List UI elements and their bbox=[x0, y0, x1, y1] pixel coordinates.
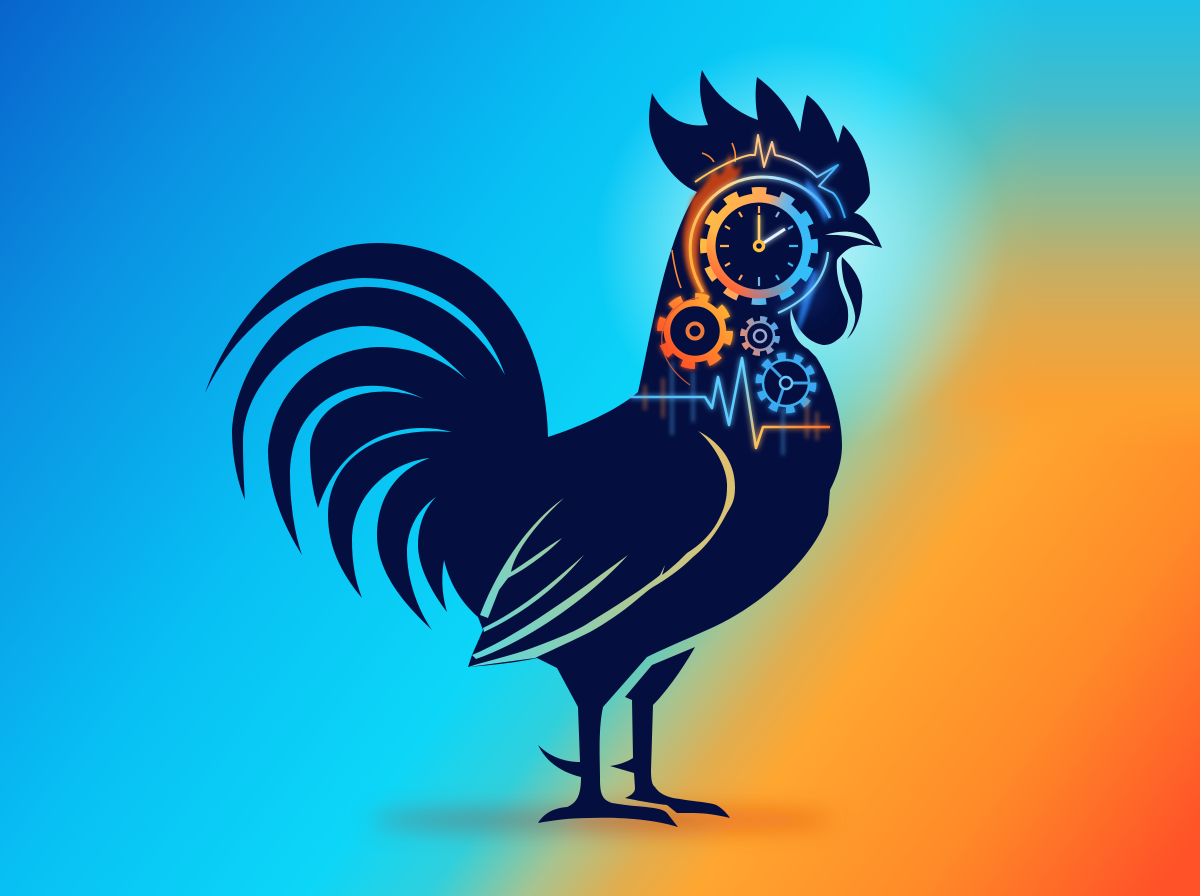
rooster silhouette bbox=[205, 70, 882, 827]
flames beside ring bbox=[683, 152, 741, 305]
clock face bbox=[716, 203, 802, 289]
thin orange arc bbox=[662, 298, 699, 385]
second feather stripe bbox=[483, 555, 584, 632]
small embers bbox=[672, 143, 735, 288]
gear rim bbox=[667, 303, 723, 359]
teal top right corner bbox=[895, 0, 1200, 427]
small gear bbox=[744, 320, 776, 352]
gear hub bbox=[688, 324, 702, 338]
wing feather stripes bbox=[468, 431, 735, 667]
upper branching feather stripe bbox=[480, 498, 564, 618]
clock ticks bbox=[720, 206, 798, 286]
long wing outline stripe bbox=[468, 431, 735, 667]
clock gear bbox=[706, 192, 812, 300]
gear hub bbox=[780, 377, 792, 389]
gear teeth bbox=[706, 192, 812, 300]
clock minute hand bbox=[759, 229, 785, 246]
halo behind head bbox=[595, 40, 1005, 450]
blue sparkle ticks bbox=[672, 362, 783, 455]
top pulse line bbox=[695, 135, 845, 218]
third feather stripe bbox=[472, 555, 628, 659]
orange sparkle ticks bbox=[645, 378, 817, 440]
blue haze on face bbox=[778, 268, 822, 312]
red tint on gear bbox=[711, 198, 807, 294]
shadow right part bbox=[565, 809, 835, 831]
gear spokes bbox=[768, 364, 810, 404]
clock centre bbox=[754, 242, 764, 250]
gear rim bbox=[711, 198, 807, 294]
shadow left part bbox=[370, 810, 710, 830]
gear teeth bbox=[759, 356, 813, 410]
gear hub bbox=[754, 330, 766, 342]
gear teeth bbox=[662, 298, 728, 364]
clock hour hand bbox=[758, 215, 760, 246]
gear rim bbox=[763, 360, 809, 406]
beak highlight bbox=[825, 232, 875, 245]
flames right side bbox=[797, 178, 826, 335]
gear teeth bbox=[744, 320, 776, 352]
illustration: glowing clock and gears bbox=[630, 135, 875, 455]
blue gear bbox=[759, 356, 813, 410]
outer ring around clock bbox=[690, 177, 830, 292]
heartbeat line bbox=[630, 358, 830, 448]
lower right blue arc bbox=[778, 252, 828, 313]
gear rim bbox=[746, 322, 774, 350]
ground shadow bbox=[370, 809, 835, 831]
orange gear bbox=[662, 298, 728, 364]
